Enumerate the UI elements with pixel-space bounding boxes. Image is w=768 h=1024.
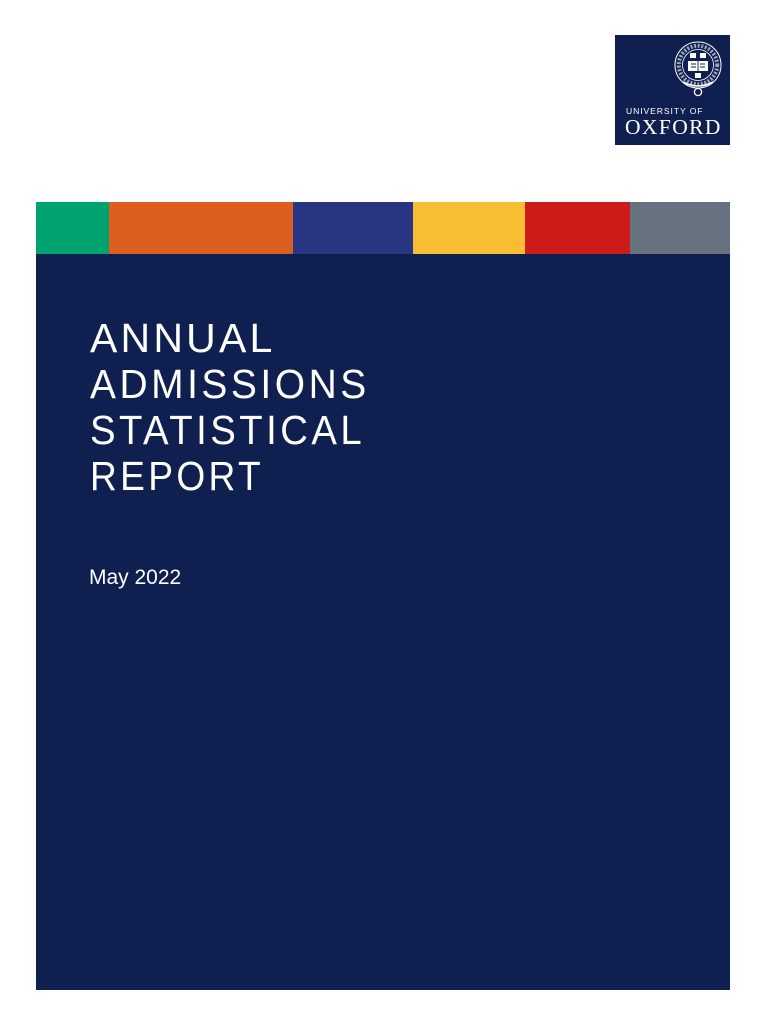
title: ANNUAL (90, 315, 276, 361)
green block (36, 202, 109, 254)
logo: University of Oxford (615, 35, 730, 145)
title: STATISTICAL (90, 407, 365, 453)
logo text: University of: UNIVERSITY OF (626, 106, 703, 116)
blue block (293, 202, 413, 254)
logo crest (674, 42, 722, 96)
yellow block (413, 202, 525, 254)
orange block (109, 202, 293, 254)
main navy panel (36, 254, 730, 990)
date: May 2022 (89, 566, 181, 589)
title: REPORT (90, 453, 264, 499)
logo text: Oxford: OXFORD (625, 115, 722, 139)
colour band (36, 202, 730, 254)
title: ADMISSIONS (90, 361, 370, 407)
grey block (630, 202, 730, 254)
red block (525, 202, 630, 254)
title (90, 315, 370, 499)
